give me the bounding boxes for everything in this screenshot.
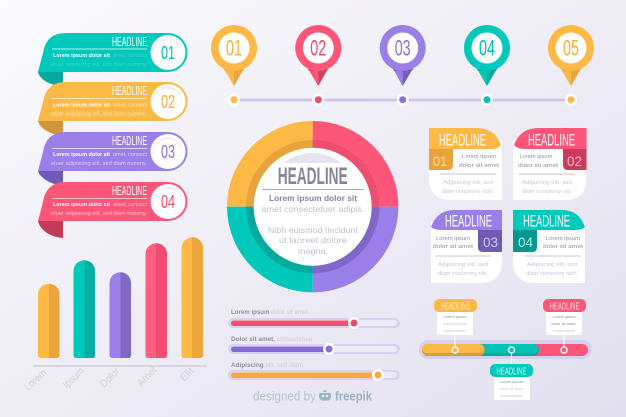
ribbon 03: HEADLINE xyxy=(112,133,147,148)
ribbon 01: HEADLINE xyxy=(112,34,147,49)
card 02: Lorem ipsum xyxy=(520,154,553,160)
segment: pink xyxy=(525,344,588,356)
slider 2 xyxy=(228,336,400,355)
bar: Elit xyxy=(182,237,203,358)
icon: freepik logo xyxy=(319,390,331,400)
panel: segmented timeline bar xyxy=(419,299,592,400)
pin 01 xyxy=(211,25,257,106)
pin 02: 02 xyxy=(310,36,326,60)
callout: yellow: Lorem ipsum xyxy=(443,314,467,319)
panel: ribbon list xyxy=(38,33,188,238)
card 03: HEADLINE xyxy=(445,212,492,230)
center headline: HEADLINE xyxy=(278,163,348,190)
ribbon 03: amet, consect xyxy=(113,152,147,158)
slider 2: Dolor sit amet, consectetuer xyxy=(231,336,314,343)
slider 3: Adipiscing elit, sed diam xyxy=(231,362,303,369)
ribbon 04 xyxy=(38,182,188,238)
pin 05 xyxy=(548,25,594,106)
callout: yellow: HEADLINE xyxy=(440,302,471,312)
ribbon 02: Lorem ipsum dolor sit xyxy=(53,102,110,108)
card 03: Lorem ipsum xyxy=(436,236,470,242)
bar track xyxy=(419,340,592,359)
pin 02 xyxy=(295,25,341,106)
card 01 xyxy=(429,128,502,200)
axis labels xyxy=(22,364,197,393)
pin 03 xyxy=(380,25,426,106)
callout: teal: HEADLINE xyxy=(496,366,527,378)
ribbon 01 xyxy=(38,33,188,86)
card 04: Adipiscing elit, sed xyxy=(527,262,577,268)
callout: yellow xyxy=(434,299,477,353)
callout: pink xyxy=(543,299,586,353)
axis labels: Amet xyxy=(135,364,159,389)
bar chart xyxy=(22,237,207,393)
panel: progress sliders xyxy=(228,309,400,381)
card 04: 04 xyxy=(518,234,533,250)
ribbon 04: Lorem ipsum dolor sit xyxy=(53,202,110,208)
card 02: HEADLINE xyxy=(528,130,575,150)
segment: purple xyxy=(313,207,398,292)
pin 03: 03 xyxy=(395,36,411,60)
center circle: ut laoreet dolore xyxy=(279,236,348,245)
slider 1 xyxy=(228,309,400,329)
callout: yellow: consectetuer xyxy=(444,328,467,333)
card 04: dolor sit amet xyxy=(543,244,584,250)
ribbon 01: amet, consect xyxy=(113,53,147,59)
axis xyxy=(33,366,207,367)
center circle: Nibh euismod tincidunt xyxy=(268,226,359,235)
segment: yellow xyxy=(422,344,485,356)
card 01: 01 xyxy=(433,153,447,169)
axis labels: Lorem xyxy=(22,367,49,393)
card 02: dolor sit amet xyxy=(518,163,559,169)
card 01: Lorem ipsum xyxy=(462,154,496,160)
ribbon 03: Lorem ipsum dolor sit xyxy=(53,152,110,158)
panel: map pin timeline xyxy=(211,25,594,106)
center circle: amet consectetuer adipis. xyxy=(262,205,364,214)
card 03: Adipiscing elit, sed xyxy=(438,262,488,268)
pin 05: 05 xyxy=(563,36,579,60)
callout: teal: dolor sit amet xyxy=(499,386,524,391)
panel: donut chart xyxy=(227,121,398,292)
center circle xyxy=(254,148,372,266)
bar: Dolor xyxy=(110,272,131,358)
callout: pink: consectetuer xyxy=(553,328,576,333)
ribbon 04: etuer adipiscing elit, sed diam nummy. xyxy=(51,211,147,217)
card 03: diam nonummy nib. xyxy=(438,271,488,277)
callout: teal: Lorem ipsum xyxy=(500,379,524,384)
ribbon 04: HEADLINE xyxy=(112,183,147,198)
bar: Lorem xyxy=(38,284,60,358)
callout: teal xyxy=(490,347,533,400)
callout: yellow: dolor sit amet xyxy=(443,321,468,326)
center text: Lorem ipsum dolor sit xyxy=(269,194,357,203)
callout: pink: HEADLINE xyxy=(550,302,580,312)
connecting line xyxy=(234,98,571,102)
bar: Amet xyxy=(146,243,167,358)
card 02: Adipiscing elit, sed xyxy=(522,180,572,186)
card 02: 02 xyxy=(567,153,582,169)
freepik credit: designed by xyxy=(253,390,317,404)
ribbon 03: 03 xyxy=(161,142,175,162)
pin 04: 04 xyxy=(479,36,495,60)
axis labels: Elit xyxy=(178,365,197,384)
card 03 xyxy=(431,210,502,283)
callout: pink: Lorem ipsum xyxy=(552,314,576,319)
axis labels: Ipsum xyxy=(61,365,87,391)
card 04 xyxy=(513,210,585,283)
ribbon 01: 01 xyxy=(161,43,175,63)
ribbon 02: HEADLINE xyxy=(112,83,147,98)
ribbon 02: etuer adipiscing elit, sed diam nummy. xyxy=(51,112,147,118)
ribbon 02: 02 xyxy=(161,92,175,112)
pin 01: 01 xyxy=(226,36,242,60)
card 01: diam nonummy nibh. xyxy=(442,189,494,195)
callout: pink: dolor sit amet. xyxy=(551,321,577,326)
callout: teal: consectetuer xyxy=(500,393,524,398)
segment: teal xyxy=(470,344,539,356)
segment: teal xyxy=(227,207,313,292)
card 01: dolor sit amet xyxy=(459,163,500,169)
card 04: diam nonummy nibh. xyxy=(526,271,578,277)
card 02: diam nonummy nib. xyxy=(522,189,572,195)
freepik credit xyxy=(253,390,372,404)
ribbon 04: 04 xyxy=(161,192,175,212)
ribbon 02 xyxy=(38,82,188,136)
bar: Ipsum xyxy=(74,260,95,358)
ribbon 01: Lorem ipsum dolor sit xyxy=(53,53,110,59)
segment: pink xyxy=(313,121,398,207)
ribbon 02: amet, consect xyxy=(113,102,147,108)
card 02 xyxy=(513,128,586,200)
axis labels: Dolor xyxy=(98,365,123,390)
card 01: Adipiscing elit, sed xyxy=(443,180,493,186)
ribbon 03 xyxy=(38,132,188,186)
segment: yellow xyxy=(227,121,313,207)
ribbon 03: etuer adipiscing elit, sed diam nummy. xyxy=(51,161,147,167)
card 03: 03 xyxy=(483,234,498,250)
card 01: HEADLINE xyxy=(439,130,486,150)
ribbon 01: etuer adipiscing elit, sed diam nummy. xyxy=(51,62,147,68)
card 04: HEADLINE xyxy=(523,212,570,230)
center circle: magna. xyxy=(298,247,328,256)
pin 04 xyxy=(464,25,510,106)
card 03: dolor sit amet xyxy=(433,244,474,250)
freepik credit: freepik xyxy=(335,390,372,404)
slider 1: Lorem ipsum dolor sit amet xyxy=(231,309,308,316)
slider 3 xyxy=(228,362,400,381)
card 04: Lorem ipsum xyxy=(546,236,580,242)
panel: headline cards xyxy=(429,128,586,283)
ribbon 04: amet, consect xyxy=(113,202,147,208)
